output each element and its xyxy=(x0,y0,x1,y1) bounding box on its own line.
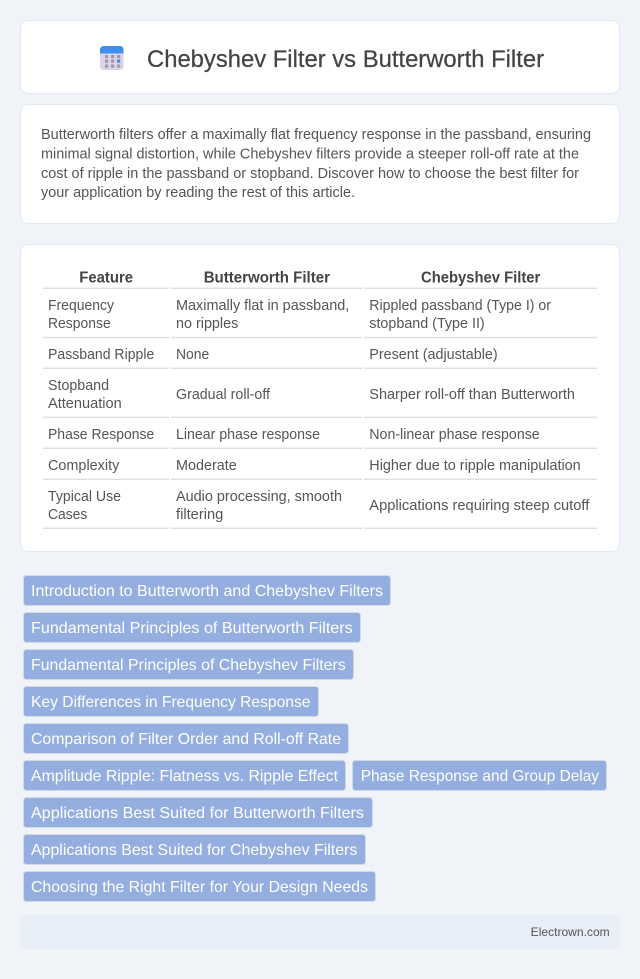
table header row: Chebyshev Filter xyxy=(421,270,540,286)
tag: introduction: Introduction to Butterworth and Chebyshev Filters xyxy=(31,583,383,600)
row: complexity: Higher due to ripple manipulation xyxy=(369,458,581,474)
row: typical use cases: filtering xyxy=(176,507,223,523)
row: passband ripple: None xyxy=(176,347,209,363)
tag: chebyshev principles xyxy=(24,650,354,680)
row: phase response xyxy=(48,427,540,443)
row: passband ripple: Present (adjustable) xyxy=(369,347,498,363)
tag: chebyshev applications: Applications Best Suited for Chebyshev Filters xyxy=(31,842,357,859)
row: complexity: Complexity xyxy=(48,458,120,474)
text block: introduction paragraph xyxy=(41,127,591,201)
tag: filter order xyxy=(24,724,348,754)
tag: phase response xyxy=(352,760,606,790)
panel: title header xyxy=(20,20,620,94)
tag: frequency response xyxy=(24,686,318,716)
row: stopband attenuation: Stopband xyxy=(48,378,109,394)
tag: choosing filter: Choosing the Right Filter for Your Design Needs xyxy=(31,879,368,896)
tag: phase response: Phase Response and Group Delay xyxy=(361,768,599,785)
tag: introduction xyxy=(24,576,390,606)
row: frequency response: stopband (Type II) xyxy=(369,316,485,332)
row: phase response: Phase Response xyxy=(48,427,154,443)
panel: introduction xyxy=(20,104,620,224)
row: typical use cases xyxy=(48,489,590,523)
tag: filter order: Comparison of Filter Order and Roll-off Rate xyxy=(31,731,341,748)
icon: calendar grid xyxy=(100,46,124,70)
text block: introduction paragraph: minimal signal distortion, while Chebyshev filters provide a steeper roll-off rate at the xyxy=(41,146,579,162)
row: complexity xyxy=(48,458,581,474)
row: typical use cases: Audio processing, smooth xyxy=(176,489,342,505)
tag: butterworth principles: Fundamental Principles of Butterworth Filters xyxy=(31,620,353,637)
title: Chebyshev Filter vs Butterworth Filter xyxy=(147,46,544,73)
footer xyxy=(20,915,620,949)
row: frequency response: Maximally flat in passband, xyxy=(176,298,349,314)
row: typical use cases: Typical Use xyxy=(48,489,121,505)
footer: Electrown.com xyxy=(531,925,610,939)
table header row: Butterworth Filter xyxy=(204,270,330,286)
tag: chebyshev applications xyxy=(24,834,366,864)
row: phase response: Non-linear phase response xyxy=(369,427,540,443)
row: stopband attenuation: Gradual roll-off xyxy=(176,387,271,403)
row: phase response: Linear phase response xyxy=(176,427,320,443)
tag: choosing filter xyxy=(24,872,376,902)
row: typical use cases: Applications requiring steep cutoff xyxy=(369,498,590,514)
tag: frequency response: Key Differences in Frequency Response xyxy=(31,694,311,711)
row: frequency response: Response xyxy=(48,316,111,332)
row: frequency response: no ripples xyxy=(176,316,238,332)
tag: amplitude ripple: Amplitude Ripple: Flatness vs. Ripple Effect xyxy=(31,768,339,785)
row: typical use cases: Cases xyxy=(48,507,87,523)
table header row xyxy=(79,270,540,286)
row: stopband attenuation: Attenuation xyxy=(48,396,122,412)
row: complexity: Moderate xyxy=(176,458,237,474)
tag: amplitude ripple xyxy=(24,760,346,790)
row: frequency response: Rippled passband (Type I) or xyxy=(369,298,551,314)
tag: chebyshev principles: Fundamental Principles of Chebyshev Filters xyxy=(31,657,346,674)
row: stopband attenuation: Sharper roll-off than Butterworth xyxy=(369,387,575,403)
row: stopband attenuation xyxy=(48,378,575,412)
row: passband ripple: Passband Ripple xyxy=(48,347,154,363)
text block: introduction paragraph: your application by reading the rest of this article. xyxy=(41,185,355,201)
table header row: Feature xyxy=(79,270,133,286)
tag: butterworth applications: Applications Best Suited for Butterworth Filters xyxy=(31,805,364,822)
tag: butterworth applications xyxy=(24,798,372,828)
row: frequency response xyxy=(48,298,551,332)
section tags xyxy=(24,576,606,902)
row: frequency response: Frequency xyxy=(48,298,115,314)
text block: introduction paragraph: cost of ripple in the passband or stopband. Discover how to choose the best filter for xyxy=(41,166,579,182)
panel: comparison table xyxy=(20,244,620,552)
tag: butterworth principles xyxy=(24,612,360,642)
row: passband ripple xyxy=(48,347,498,363)
text block: introduction paragraph: Butterworth filters offer a maximally flat frequency response in the passband, ensuring xyxy=(41,127,591,143)
